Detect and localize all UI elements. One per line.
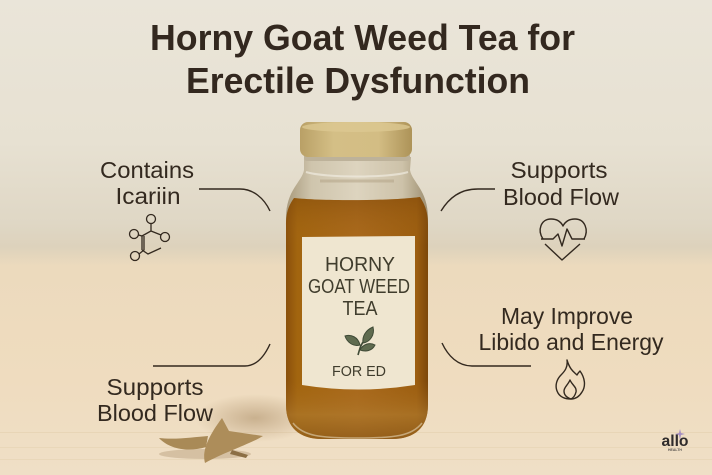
callout text [478, 303, 664, 355]
icon: tea leaves [345, 327, 375, 355]
callout text: May Improve [501, 303, 633, 329]
icon: heart with pulse [540, 219, 586, 260]
callout text [100, 157, 194, 209]
jar label [302, 236, 415, 390]
jar tea liquid [286, 197, 428, 439]
callout: contains icariin [100, 157, 270, 260]
callout text: Blood Flow [503, 184, 619, 210]
label text: HORNY [325, 253, 395, 276]
callout text: Libido and Energy [478, 329, 664, 355]
dried leaves [159, 418, 263, 463]
callout text: Blood Flow [97, 400, 213, 426]
callout text: Supports [106, 374, 204, 400]
logo: allo health: allo [662, 433, 688, 450]
logo: allo health: HEALTH [668, 448, 682, 452]
arrow connector [442, 343, 531, 366]
callout: may improve libido and energy [442, 303, 664, 399]
icon: molecule [130, 214, 170, 260]
callout text [503, 157, 619, 210]
label text: TEA [342, 297, 378, 320]
arrow connector [441, 189, 495, 211]
title: Horny Goat Weed Tea for [150, 17, 575, 58]
jar [286, 122, 428, 439]
label text: FOR ED [332, 364, 386, 380]
callout text: Contains [100, 157, 194, 183]
jar glass shoulder [286, 157, 428, 225]
callout text [97, 374, 213, 426]
callout: supports blood flow top [441, 157, 619, 260]
icon: flame [556, 360, 584, 399]
callout text: Icariin [116, 183, 180, 209]
arrow connector [153, 344, 270, 366]
arrow connector [199, 189, 270, 211]
callout text: Supports [510, 157, 608, 183]
callout: supports blood flow bottom [97, 344, 270, 426]
jar shadow [195, 394, 315, 442]
label text: GOAT WEED [308, 275, 410, 298]
label text [308, 253, 410, 380]
title [150, 17, 575, 101]
title: Erectile Dysfunction [186, 60, 530, 101]
jar lid [300, 122, 412, 161]
